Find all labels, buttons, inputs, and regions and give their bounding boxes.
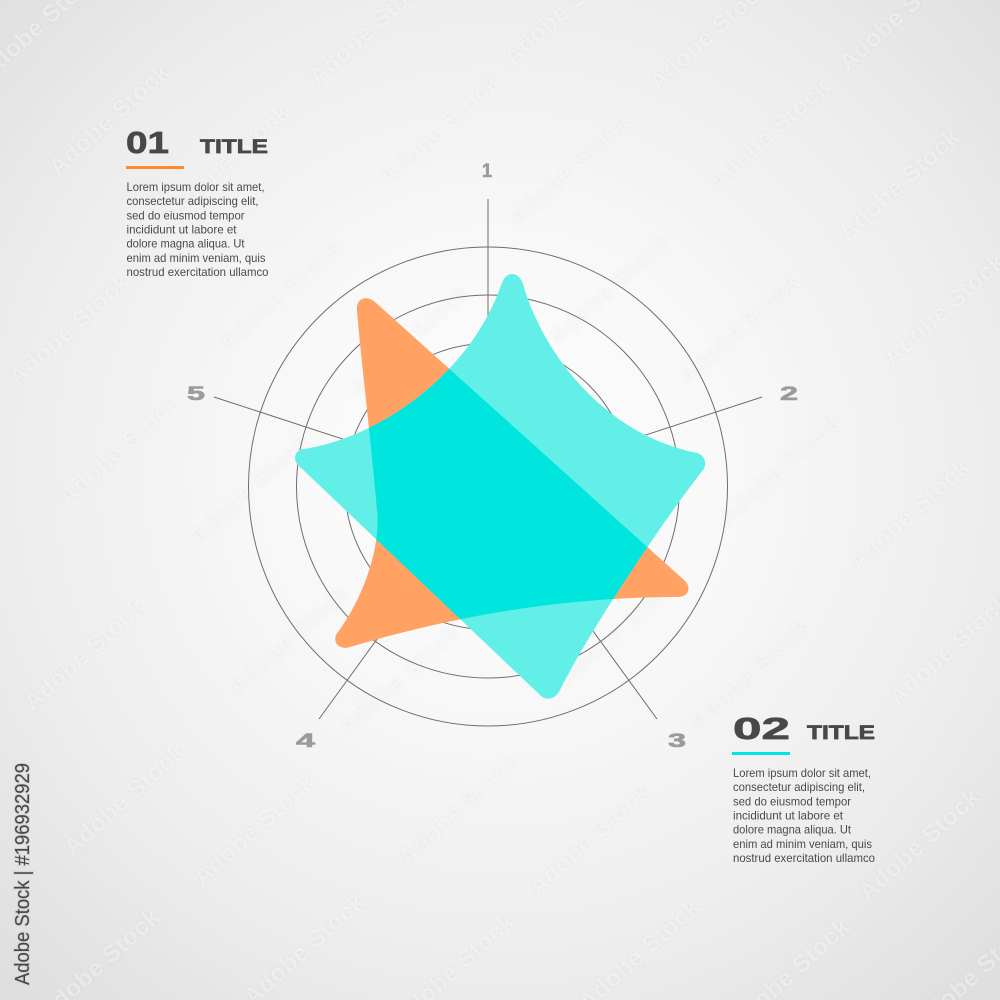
watermark pattern: Adobe Stock [714,408,846,531]
number 01: 01 [126,125,169,160]
legend block 02 [732,711,875,865]
watermark pattern: Adobe Stock [844,453,976,576]
stock id side text: Adobe Stock | #196932929 [12,763,34,985]
radar grid [214,199,762,726]
body text 02: consectetur adipiscing elit, [733,780,865,794]
watermark pattern: Adobe Stock [344,278,476,401]
watermark pattern: Adobe Stock [504,108,636,231]
watermark pattern: Adobe Stock [224,578,356,701]
watermark pattern: Adobe Stock [44,58,176,181]
axis label 5: 5 [187,384,206,405]
watermark pattern: Adobe Stock [374,68,506,191]
overlap of the two series [369,368,648,620]
watermark pattern: Adobe Stock [334,618,466,741]
legend block 01 [126,125,269,279]
watermark pattern: Adobe Stock [544,228,676,351]
body text 02: enim ad minim veniam, quis [733,837,872,851]
number 02: 02 [733,711,790,746]
watermark pattern: Adobe Stock [214,233,346,356]
title 02: TITLE [807,723,875,744]
axis label 2: 2 [780,384,798,405]
body text 01 [126,180,269,279]
body text 01: consectetur adipiscing elit, [126,194,258,208]
body text 02: incididunt ut labore et [733,808,844,822]
body text 02: Lorem ipsum dolor sit amet, [733,766,871,780]
watermark pattern: Adobe Stock [524,778,656,901]
body text 02: dolore magna aliqua. Ut [733,822,852,836]
body text 01: incididunt ut labore et [126,222,237,236]
orange underline [126,166,184,169]
body text 01: sed do eiusmod tempor [126,208,244,222]
watermark pattern: Adobe Stock [554,568,686,691]
axis label 3: 3 [668,731,686,752]
body text 01: nostrud exercitation ullamco [126,265,269,279]
body text 01: Lorem ipsum dolor sit amet, [126,180,264,194]
title 01: TITLE [200,137,268,158]
watermark pattern: Adobe Stock [189,768,321,891]
watermark pattern: Adobe Stock [704,73,836,196]
axis label 4: 4 [296,731,316,752]
watermark pattern: Adobe Stock [394,748,526,871]
watermark pattern: Adobe Stock [19,593,151,716]
body text 01: dolore magna aliqua. Ut [126,236,245,250]
watermark pattern: Adobe Stock [54,388,186,511]
body text 02 [733,766,875,865]
watermark pattern: Adobe Stock [184,428,316,551]
watermark pattern: Adobe Stock [164,98,296,221]
cyan underline [732,752,790,755]
watermark pattern: Adobe Stock [59,738,191,861]
body text 02: nostrud exercitation ullamco [733,851,875,865]
body text 01: enim ad minim veniam, quis [126,251,266,265]
axis label 1: 1 [482,161,492,182]
data series 01: orange shape [335,298,689,648]
body text 02: sed do eiusmod tempor [733,794,851,808]
watermark pattern: Adobe Stock [684,613,816,736]
watermark pattern: Adobe Stock [854,783,986,906]
watermark pattern: Adobe Stock [834,123,966,246]
data series 02: cyan shape [295,274,705,699]
watermark pattern: Adobe Stock [674,268,806,391]
watermark pattern: Adobe Stock [4,268,136,391]
